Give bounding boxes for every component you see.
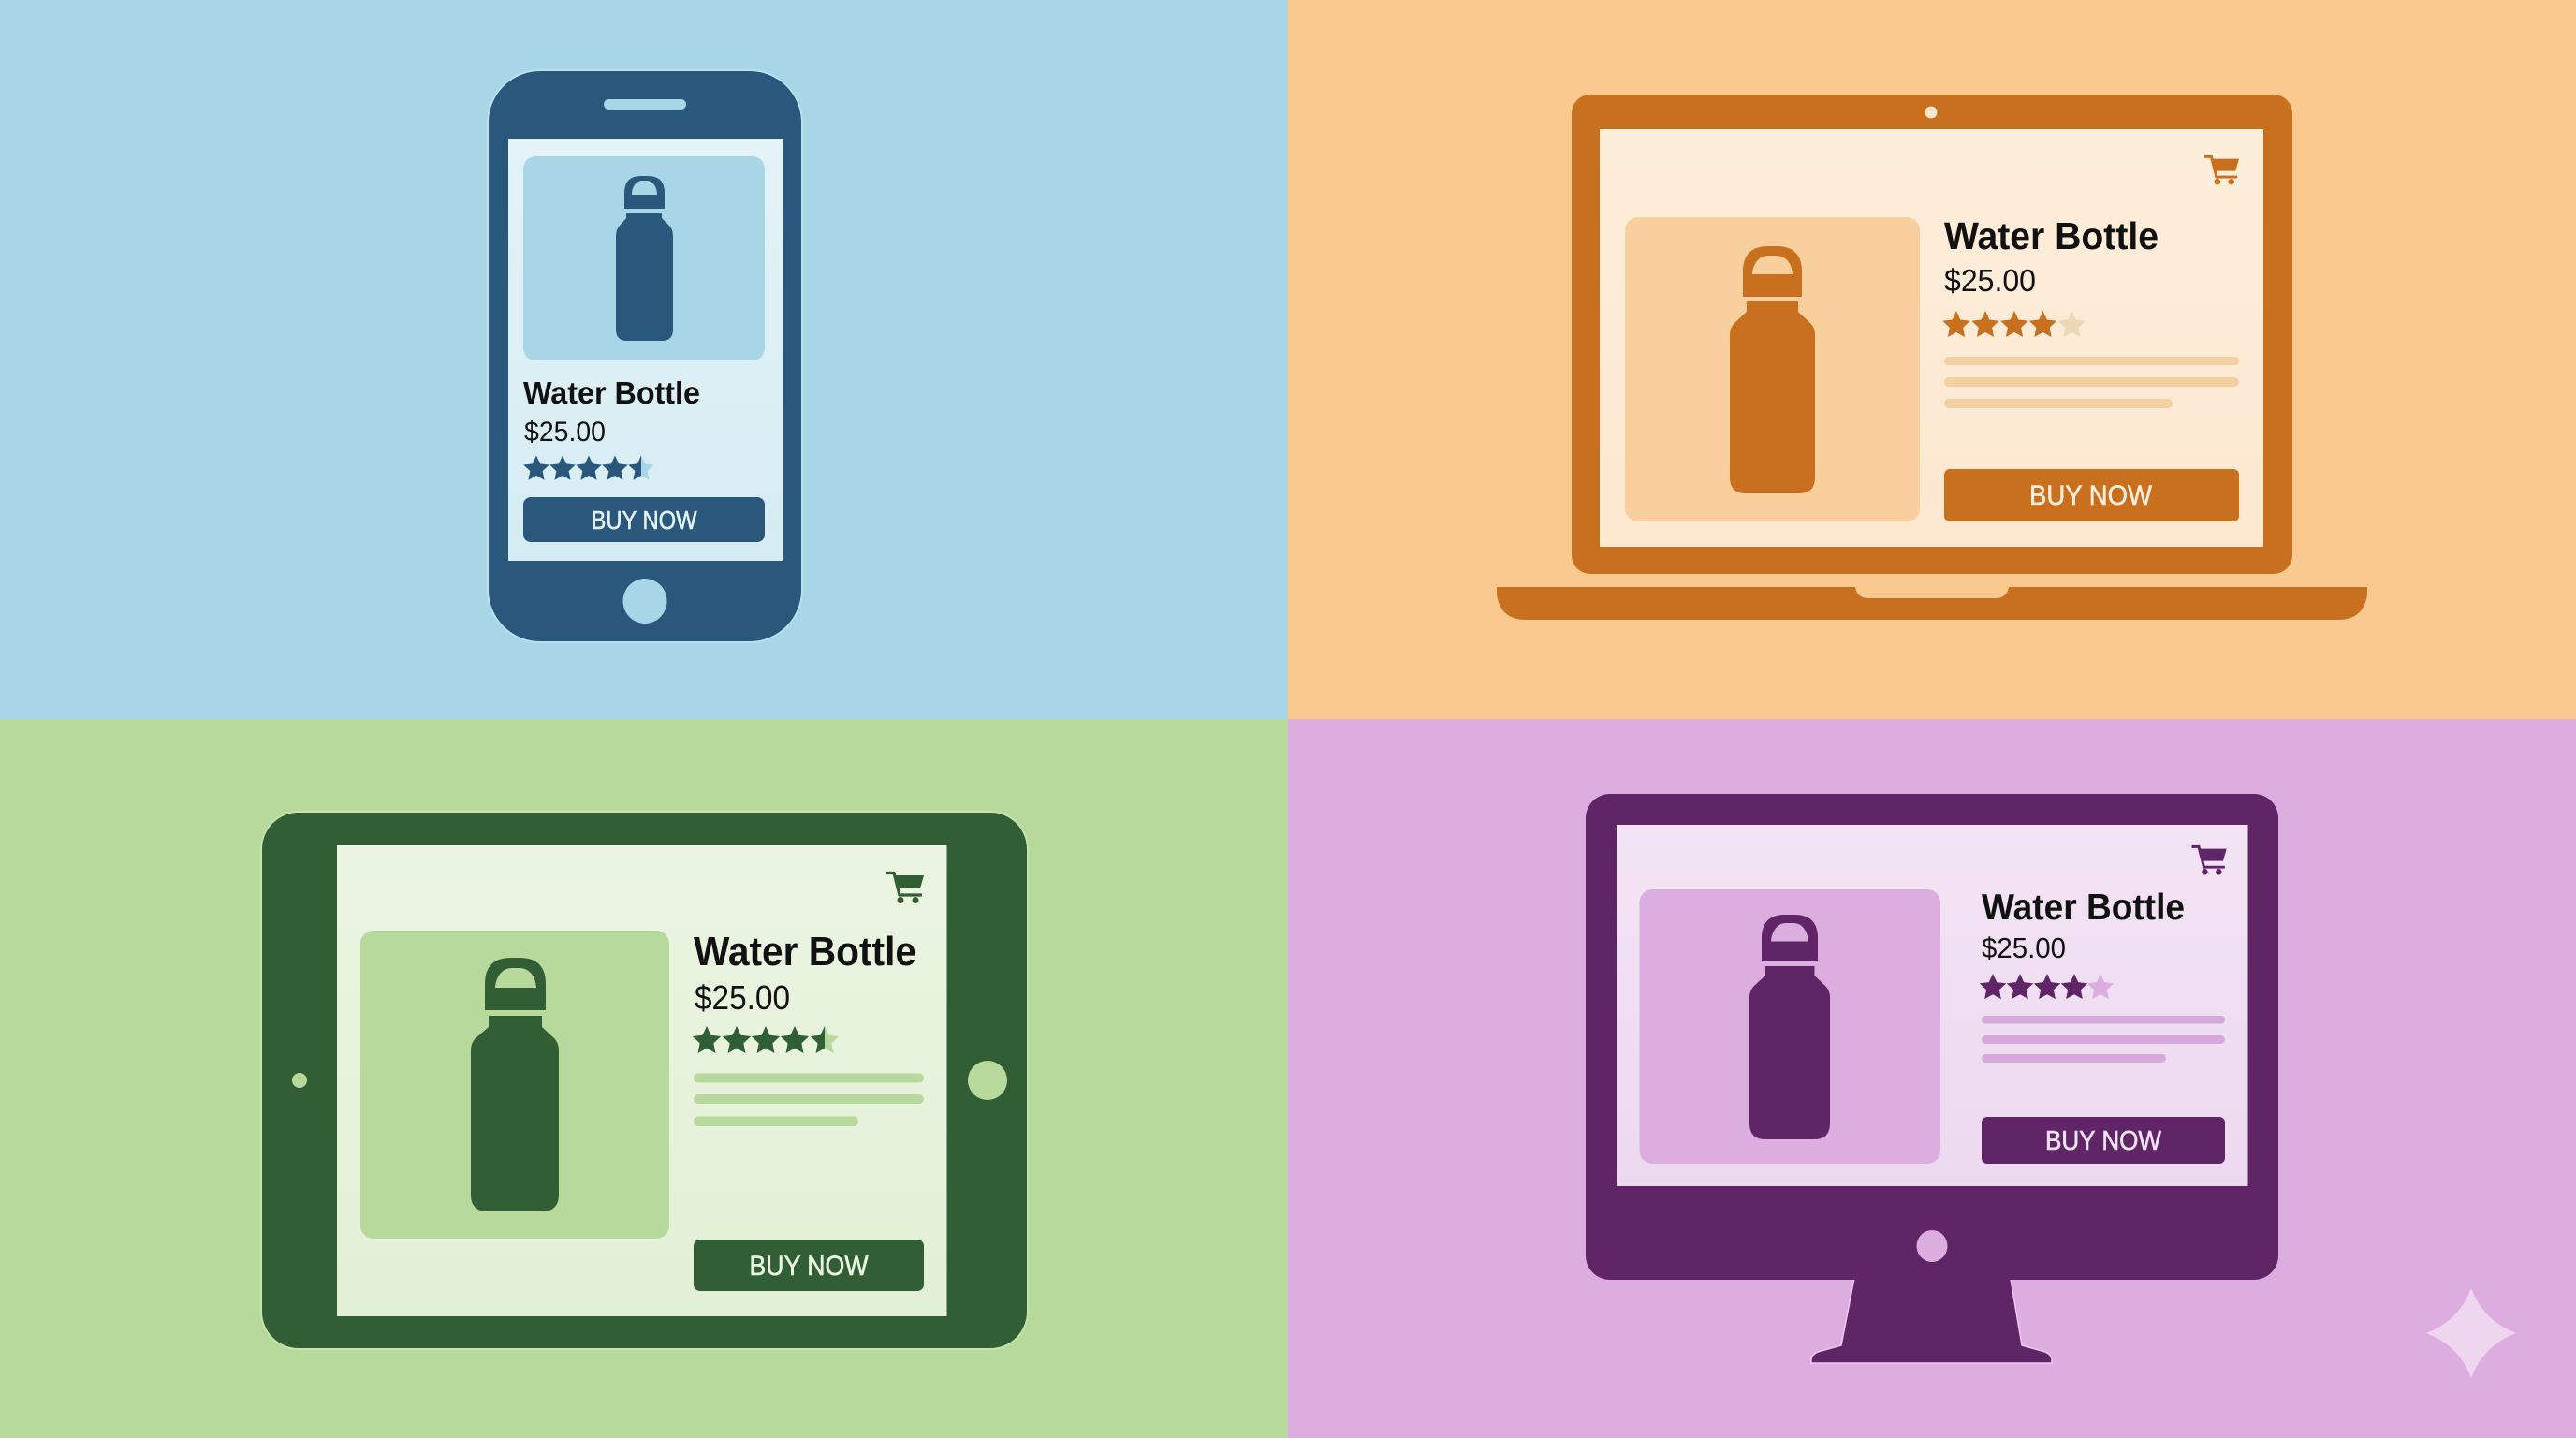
product image panel <box>523 156 765 360</box>
bottle body <box>1730 301 1815 493</box>
image background <box>523 156 765 360</box>
monitor screen <box>1617 825 2248 1186</box>
icon: shopping cart <box>2204 156 2239 184</box>
bottle body <box>471 1016 559 1211</box>
image background <box>360 931 669 1239</box>
product image panel <box>360 931 669 1239</box>
bottle body <box>616 213 673 341</box>
product name: Water Bottle <box>1982 888 2185 928</box>
icon: smartphone device <box>488 70 802 642</box>
product image panel <box>1640 889 1940 1164</box>
star rating <box>1942 311 2086 337</box>
icon: shopping cart <box>886 873 924 903</box>
buy now button <box>1982 1117 2225 1164</box>
bottle body <box>1749 966 1830 1139</box>
buy now button: BUY NOW <box>2029 480 2153 511</box>
laptop camera <box>1925 107 1938 118</box>
bottle cap <box>1743 246 1802 297</box>
phone body <box>488 70 802 642</box>
tablet body <box>261 812 1028 1349</box>
monitor stand <box>1811 1273 2052 1363</box>
bottle cap <box>624 176 665 209</box>
panel: laptop on orange background <box>1288 0 2576 719</box>
icon: desktop monitor device <box>1586 794 2278 1363</box>
icon: water bottle <box>471 958 559 1211</box>
monitor body <box>1586 794 2278 1280</box>
tablet screen <box>337 845 947 1316</box>
phone speaker <box>604 99 686 110</box>
product name: Water Bottle <box>694 929 916 975</box>
buy now button: BUY NOW <box>592 506 697 535</box>
price: $25.00 <box>1982 932 2066 964</box>
buy now button: BUY NOW <box>2045 1126 2162 1156</box>
image background <box>1640 889 1940 1164</box>
star rating <box>693 1026 839 1053</box>
panel: tablet on green background <box>0 719 1288 1438</box>
price: $25.00 <box>524 417 606 448</box>
panel: phone on blue background <box>0 0 1288 719</box>
icon: tablet device <box>261 812 1028 1349</box>
buy now button: BUY NOW <box>749 1251 869 1282</box>
panel: desktop monitor on purple background <box>1288 719 2576 1438</box>
star rating <box>523 455 654 480</box>
phone home button <box>623 579 666 624</box>
panel background: orange <box>1288 0 2576 719</box>
price: $25.00 <box>695 978 790 1017</box>
price: $25.00 <box>1944 263 2036 298</box>
icon: water bottle <box>1730 246 1815 493</box>
icon: water bottle <box>616 176 673 341</box>
buy now button <box>1944 469 2239 521</box>
image background <box>1625 217 1920 521</box>
bottle cap <box>485 958 546 1010</box>
buy now button <box>694 1240 924 1291</box>
buy now button <box>523 497 765 542</box>
panel background: blue <box>0 0 1288 719</box>
panel background: purple <box>1288 719 2576 1438</box>
star rating <box>1980 974 2114 999</box>
icon: shopping cart <box>2192 846 2227 875</box>
panel background: green <box>0 719 1288 1438</box>
phone screen <box>508 139 783 561</box>
icon: water bottle <box>1749 915 1830 1139</box>
product image panel <box>1625 217 1920 521</box>
description lines <box>1944 357 2239 408</box>
description lines <box>694 1073 924 1126</box>
laptop screen <box>1600 129 2263 547</box>
monitor power button <box>1917 1230 1947 1262</box>
tablet camera <box>292 1073 307 1088</box>
icon: sparkle watermark <box>2426 1288 2516 1378</box>
product name: Water Bottle <box>1944 214 2159 257</box>
laptop lid <box>1572 95 2292 574</box>
laptop base <box>1497 587 2367 620</box>
icon: laptop device <box>1497 95 2367 620</box>
bottle cap <box>1762 915 1818 961</box>
product name: Water Bottle <box>523 375 700 410</box>
description lines <box>1982 1016 2225 1063</box>
tablet home button <box>968 1061 1007 1100</box>
